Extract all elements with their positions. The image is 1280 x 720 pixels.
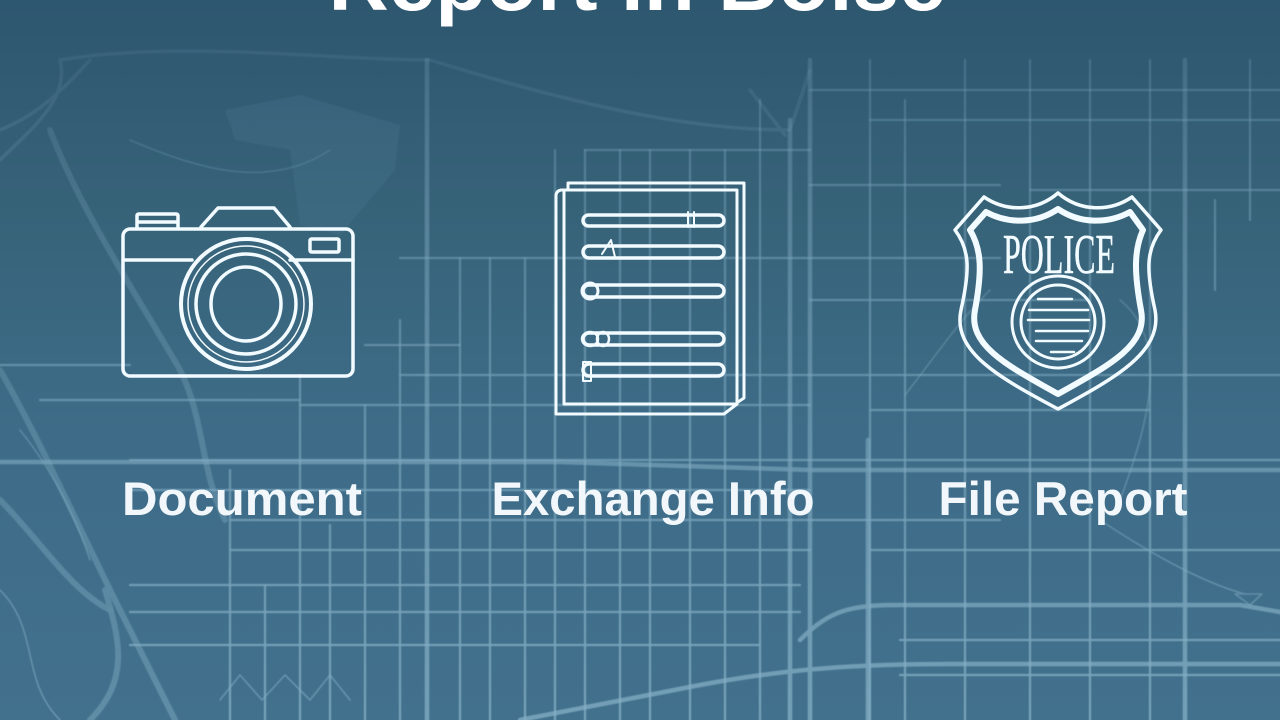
label: File Report: File Report: [938, 472, 1188, 525]
form lines: [583, 215, 724, 376]
icon: police badge: [955, 193, 1161, 409]
badge word: POLICE: [1003, 224, 1115, 286]
label: Exchange Info: Exchange Info: [492, 472, 814, 525]
icon: document: [556, 183, 744, 414]
map park patches: [225, 95, 400, 235]
label: Document: Document: [122, 472, 362, 525]
icon: camera: [123, 208, 353, 376]
